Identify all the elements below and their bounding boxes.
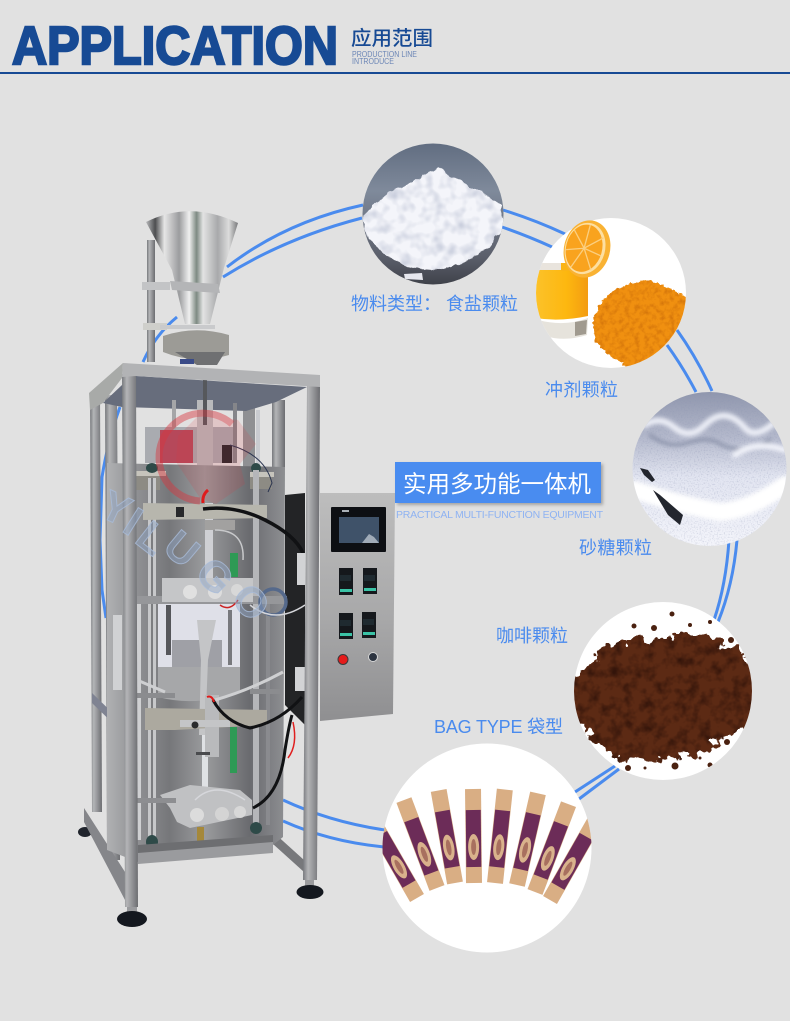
callout: multi-function machine — [395, 462, 604, 521]
temperature controllers — [339, 568, 377, 639]
central window and lower cylinder — [158, 603, 240, 701]
mid sealing assembly — [135, 672, 283, 757]
black and red hoses — [203, 445, 303, 808]
double ring connecting the product circles — [100, 205, 737, 847]
subheading: production line introduce: INTRODUCE — [352, 56, 394, 66]
rear frame — [84, 393, 304, 900]
dark marks in sugar — [640, 468, 683, 525]
circle: stick bag samples — [382, 744, 592, 952]
header rule — [0, 72, 790, 74]
white electrical boxes — [295, 553, 305, 691]
hopper — [146, 211, 238, 365]
machine feet — [78, 827, 324, 927]
header — [0, 16, 790, 76]
title: APPLICATION: APPLICATION — [12, 16, 338, 76]
hopper stand — [142, 240, 170, 362]
YILUGO watermark: L — [128, 512, 177, 564]
powder heap — [593, 281, 688, 368]
central vertical column — [197, 503, 216, 795]
label: drink granules: 冲剂颗粒 — [545, 380, 618, 400]
selector switch — [368, 652, 378, 662]
circle: coffee granules — [570, 602, 758, 780]
orange slice — [557, 215, 617, 283]
shelf brackets — [136, 463, 274, 490]
green strips — [230, 553, 238, 773]
packaging machine — [78, 211, 395, 927]
circle: orange drink powder — [535, 215, 688, 368]
YILUGO watermark: I — [116, 498, 151, 544]
circle: salt granules — [360, 140, 506, 286]
YILUGO watermark: Y — [93, 481, 139, 535]
emergency stop button — [338, 654, 348, 664]
control panel — [320, 493, 395, 721]
YILUGO watermark: G — [187, 548, 243, 604]
touch screen — [331, 507, 386, 552]
label: bag type: BAG TYPE 袋型 — [434, 717, 563, 737]
heading: Chinese subtitle: 应用范围 — [351, 27, 433, 50]
base strip — [138, 838, 273, 864]
front frame and top beams — [89, 363, 320, 907]
label: salt granules: 物料类型： 食盐颗粒 — [351, 294, 518, 314]
dark side housing — [285, 493, 305, 725]
upper mechanism behind the top frame — [145, 380, 260, 504]
sealing bar top — [143, 503, 267, 560]
sugar embossed waves — [635, 416, 785, 512]
circle: white sugar — [630, 390, 790, 548]
callout heading: 实用多功能一体机 — [403, 471, 591, 497]
vertical guide rods — [113, 470, 270, 840]
label: coffee granules: 咖啡颗粒 — [496, 626, 568, 646]
bottom sealing assembly — [136, 785, 262, 849]
subheading: production line introduce — [352, 49, 417, 66]
juice glass — [535, 263, 589, 339]
upper sealing assembly — [137, 578, 305, 615]
steel back panel — [107, 463, 285, 862]
YILUGO watermark: O — [223, 574, 280, 630]
YILUGO watermark: U — [155, 521, 209, 576]
callout banner — [395, 462, 601, 503]
red logo watermark — [159, 413, 256, 504]
YILUGO watermark — [93, 481, 280, 630]
scattered coffee crumbs — [625, 612, 734, 771]
label: sugar granules: 砂糖颗粒 — [579, 538, 652, 558]
top underside plate — [103, 376, 307, 411]
subheading: production line introduce: PRODUCTION LINE — [352, 49, 417, 59]
callout subtitle: PRACTICAL MULTI-FUNCTION EQUIPMENT — [396, 509, 604, 521]
